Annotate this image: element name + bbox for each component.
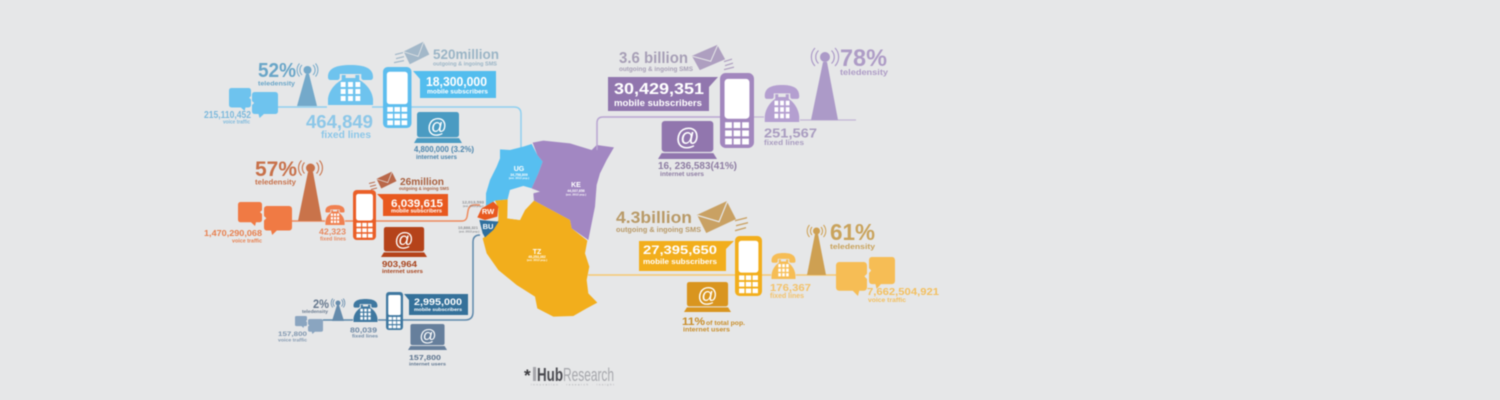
text: Burundi voice traffic: voice traffic [278, 338, 308, 342]
logo: iHub Research: Research [563, 365, 614, 385]
icon: Tanzania SMS envelope [697, 201, 748, 233]
icon: Kenya fixed telephone [765, 85, 799, 122]
icon: Kenya SMS envelope [692, 45, 734, 70]
text: Uganda teledensity: 52% [258, 60, 296, 82]
text: Burundi fixed lines [350, 328, 379, 338]
map: Burundi [479, 220, 499, 237]
callout: Rwanda mobile subscribers: 6,039,615 [391, 198, 443, 210]
text: Burundi voice traffic: 157,800 [278, 331, 307, 338]
map: East Africa countries [458, 141, 614, 317]
icon: Tanzania mobile phone [735, 236, 762, 296]
text: Tanzania internet users [682, 316, 745, 334]
label: Uganda on map: UG [514, 166, 525, 173]
text: Rwanda voice traffic [204, 228, 262, 244]
text: Kenya fixed lines: 251,567 [764, 126, 817, 140]
icon: Burundi fixed telephone [354, 299, 377, 322]
callout: Tanzania mobile subscribers: 27,395,650 [643, 243, 717, 257]
label: Uganda on map: 34,758,809 [510, 173, 528, 177]
text: Rwanda SMS: outgoing & ingoing SMS [399, 186, 449, 191]
text: Uganda internet users: internet users [416, 155, 458, 161]
text: Rwanda SMS [399, 177, 449, 191]
text: Uganda internet users: 4,800,000 (3.2%) [414, 145, 474, 154]
icon: Tanzania fixed telephone [772, 253, 795, 279]
label: Kenya on map: (est. 2013 pop.) [566, 192, 586, 196]
text: Uganda fixed lines: 464,849 [306, 112, 373, 132]
text: Tanzania SMS [616, 208, 701, 234]
icon: Kenya tower [811, 48, 839, 120]
icon: Tanzania voice traffic bubbles [836, 257, 895, 296]
icon: Tanzania tower [807, 225, 826, 275]
text: Tanzania internet users: 11% [682, 316, 705, 328]
logo: iHub Research: * [524, 366, 531, 385]
logo: iHub Research [524, 365, 614, 386]
callout: Kenya mobile subscribers: mobile subscribers [614, 98, 702, 108]
icon: Uganda laptop [414, 112, 462, 143]
panel: Rwanda statistics [204, 158, 480, 275]
label: Rwanda on map: RW [482, 207, 495, 216]
text: Tanzania fixed lines [770, 283, 811, 300]
text: Rwanda voice traffic: 1,470,290,068 [204, 228, 262, 238]
icon: Tanzania laptop: @ [697, 285, 718, 307]
text: Tanzania voice traffic: 7,662,504,921 [867, 287, 939, 298]
text: Tanzania fixed lines: 176,367 [770, 283, 811, 294]
icon: Burundi mobile phone [386, 292, 403, 330]
text: Tanzania internet users: of total pop. [706, 320, 745, 327]
map: Tanzania [483, 199, 597, 317]
text: Uganda SMS: outgoing & ingoing SMS [433, 62, 497, 68]
label: Rwanda on map: (est. 2013 pop.) [463, 204, 483, 208]
panel: Burundi statistics [278, 235, 480, 368]
map: Kenya [532, 141, 614, 240]
label: Kenya on map [566, 182, 586, 196]
text: Kenya internet users [658, 161, 737, 178]
text: Kenya SMS: 3.6 billion [619, 50, 688, 67]
label: Kenya on map: 44,037,656 [567, 189, 585, 193]
callout: Burundi mobile subscribers [404, 294, 468, 315]
text: Uganda internet users [414, 145, 474, 161]
text: Kenya SMS: outgoing & ingoing SMS [619, 67, 693, 73]
callout: Rwanda mobile subscribers [377, 194, 448, 216]
text: Burundi voice traffic [278, 331, 308, 342]
icon: Burundi voice traffic bubbles [295, 316, 323, 334]
label: Rwanda on map: 12,013,593 [462, 200, 485, 204]
text: Kenya internet users: 16, 236,583(41%) [658, 161, 737, 172]
callout: Burundi mobile subscribers: 2,995,000 [414, 297, 462, 308]
label: Tanzania on map [527, 249, 547, 262]
label: Burundi on map [458, 222, 493, 234]
callout: Uganda mobile subscribers: 18,300,000 [426, 74, 487, 89]
text: Rwanda internet users [382, 259, 423, 275]
text: Rwanda internet users: internet users [382, 269, 423, 275]
label: Rwanda on map [462, 200, 495, 216]
panel: Uganda statistics [204, 42, 521, 161]
label: Tanzania on map: (est. 2013 pop.) [527, 258, 547, 262]
callout: Tanzania mobile subscribers: mobile subscribers [643, 257, 717, 266]
label: Burundi on map: BU [483, 222, 493, 231]
text: Kenya teledensity: teledensity [840, 68, 889, 77]
text: Uganda teledensity: teledensity [258, 80, 295, 88]
text: Kenya internet users: internet users [660, 172, 705, 178]
icon: Rwanda voice traffic bubbles [238, 202, 292, 235]
panel: Kenya statistics [597, 45, 889, 178]
text: Rwanda SMS: 26million [400, 177, 444, 188]
text: Tanzania teledensity: 61% [830, 219, 875, 245]
icon: Kenya mobile phone [720, 73, 754, 148]
text: Uganda SMS: 520million [433, 46, 499, 62]
icon: Kenya laptop [658, 121, 717, 159]
text: Rwanda fixed lines [319, 228, 347, 242]
label: Kenya on map: KE [571, 182, 581, 189]
text: Rwanda teledensity: teledensity [255, 180, 296, 186]
text: Tanzania SMS: outgoing & ingoing SMS [616, 227, 701, 234]
callout: Rwanda mobile subscribers: mobile subscribers [391, 208, 442, 214]
text: Tanzania voice traffic [867, 287, 939, 304]
callout: Burundi mobile subscribers: mobile subscribers [414, 307, 462, 313]
text: Burundi internet users: internet users [409, 362, 446, 368]
text: Uganda fixed lines: fixed lines [321, 130, 371, 141]
text: Kenya teledensity: 78% [840, 45, 887, 72]
icon: Uganda fixed telephone [328, 65, 373, 105]
text: Uganda fixed lines [306, 112, 373, 141]
panel: Tanzania statistics [588, 201, 939, 334]
text: Kenya fixed lines: fixed lines [764, 138, 804, 147]
label: Tanzania on map: TZ [533, 249, 542, 256]
text: Tanzania voice traffic: voice traffic [868, 297, 906, 304]
label: Burundi on map: (est. 2013 pop.) [459, 230, 479, 234]
icon: Burundi laptop: @ [419, 326, 437, 345]
text: Kenya fixed lines [764, 126, 817, 147]
icon: Rwanda SMS envelope [369, 172, 396, 190]
text: Burundi internet users: 157,800 [409, 353, 441, 362]
icon: Rwanda laptop [381, 227, 427, 257]
callout: Uganda mobile subscribers: mobile subscribers [427, 88, 488, 96]
callout: Tanzania mobile subscribers [639, 241, 734, 271]
text: Burundi fixed lines: 80,039 [350, 328, 377, 334]
icon: Tanzania laptop [684, 282, 731, 312]
icon: Burundi tower [331, 298, 345, 321]
icon: Rwanda tower [298, 160, 322, 221]
callout: Kenya mobile subscribers: 30,429,351 [614, 81, 704, 98]
text: Uganda voice traffic: 215,110,452 [204, 110, 251, 121]
text: Uganda voice traffic [204, 110, 251, 126]
logo: iHub Research: Hub [537, 365, 563, 385]
text: Rwanda fixed lines: fixed lines [320, 236, 346, 242]
logo: iHub Research: innovation · research · insight [531, 382, 614, 386]
map: Lake Victoria [507, 186, 533, 220]
icon: Rwanda mobile phone [353, 190, 376, 240]
icon: Uganda tower [297, 64, 318, 106]
label: Uganda on map [509, 166, 529, 180]
text: Rwanda teledensity: 57% [255, 158, 297, 181]
icon: Burundi laptop [408, 324, 447, 350]
icon: Kenya laptop: @ [675, 124, 700, 151]
icon: Rwanda fixed telephone [325, 205, 345, 225]
text: Tanzania internet users: internet users [683, 328, 731, 334]
icon: Uganda mobile phone [383, 67, 412, 128]
text: Burundi fixed lines: fixed lines [352, 334, 379, 338]
text: Tanzania fixed lines: fixed lines [770, 293, 804, 300]
map: Rwanda [477, 202, 498, 220]
icon: Uganda laptop: @ [427, 116, 447, 138]
text: Burundi teledensity [302, 297, 329, 314]
callout: Uganda mobile subscribers [413, 71, 496, 98]
label: Uganda on map: (est. 2013 pop.) [509, 176, 529, 180]
text: Tanzania teledensity: teledensity [830, 242, 876, 251]
icon: Uganda SMS envelope [394, 42, 429, 64]
icon: Uganda voice traffic bubbles [229, 88, 278, 118]
text: Rwanda voice traffic: voice traffic [232, 238, 262, 244]
text: Uganda voice traffic: voice traffic [223, 120, 250, 126]
label: Tanzania on map: 49,253,362 [528, 255, 546, 259]
text: Burundi teledensity: teledensity [302, 309, 329, 314]
label: Burundi on map: 10,888,321 [458, 225, 479, 230]
map: Uganda [486, 144, 543, 206]
callout: Kenya mobile subscribers [608, 77, 718, 111]
icon: Rwanda laptop: @ [394, 230, 414, 251]
text: Rwanda internet users: 903,964 [382, 259, 417, 269]
text: Rwanda fixed lines: 42,323 [319, 228, 347, 236]
text: Tanzania SMS: 4.3billion [616, 208, 692, 227]
text: Burundi internet users [409, 353, 446, 368]
text: Burundi teledensity: 2% [313, 297, 329, 311]
